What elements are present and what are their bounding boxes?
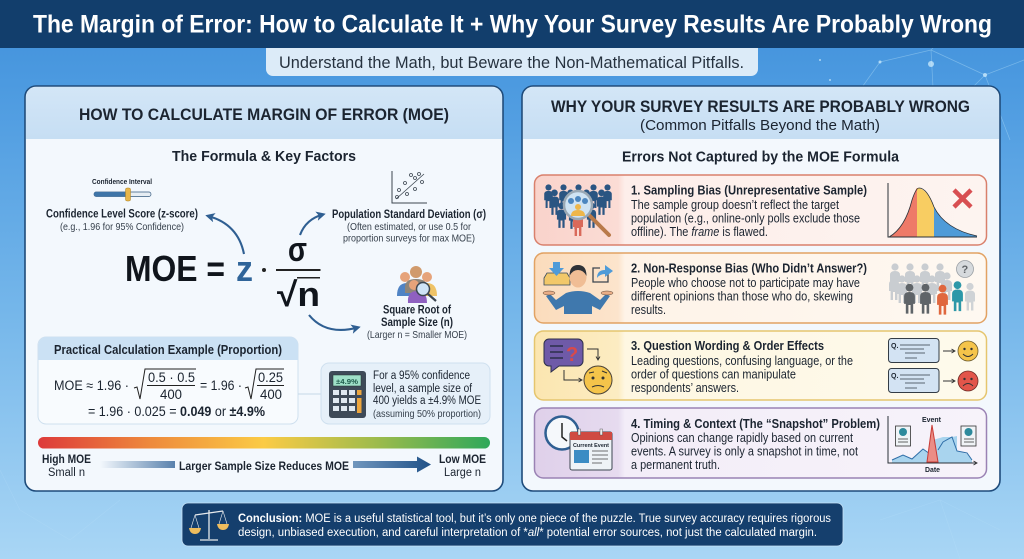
label: confidence level score: (e.g., 1.96 for 95% Confidence) <box>60 221 184 233</box>
panel heading: why results are wrong: WHY YOUR SURVEY RESULTS ARE PROBABLY WRONG <box>551 97 970 116</box>
label: square root of sample size: (Larger n = Smaller MOE) <box>367 329 467 341</box>
panel: how to calculate <box>25 86 503 491</box>
icon: non-respondents crowd: ? <box>962 264 968 276</box>
panel heading: how to calculate <box>26 87 502 139</box>
label: square root of sample size: Sample Size (n) <box>381 317 453 329</box>
heading: formula and key factors: The Formula & Key Factors <box>172 148 356 165</box>
formula <box>125 231 320 314</box>
callout text: 400 yields a ±4.9% MOE <box>373 395 481 407</box>
callout text: (assuming 50% proportion) <box>373 408 481 420</box>
icon: clock and calendar: Current Event <box>573 443 609 449</box>
chart: opinion over time with event spike: Date <box>925 467 940 474</box>
icon: confidence interval slider: Confidence Interval <box>92 177 152 186</box>
calculation working: = 1.96 · 0.025 = 0.049 or ±4.9% <box>88 404 265 419</box>
label: low moe: Large n <box>444 467 481 479</box>
icon: question forms and reactions: Q. <box>891 373 898 380</box>
icon: confusing question: ? <box>566 344 578 366</box>
icon: confidence interval slider <box>92 177 152 201</box>
panel heading: why results are wrong: (Common Pitfalls Beyond the Math) <box>640 118 880 134</box>
card text: population (e.g., online-only polls exclude those <box>631 212 860 226</box>
label: population standard deviation: (Often estimated, or use 0.5 for <box>347 221 471 233</box>
label: square root of sample size: Square Root of <box>383 304 451 316</box>
calculation working <box>54 369 284 419</box>
result callout with calculator <box>321 363 490 424</box>
formula: √n <box>277 276 320 314</box>
card text: events. A survey is only a snapshot in time, not <box>631 444 858 458</box>
card text <box>631 182 867 239</box>
heading: errors not captured: Errors Not Captured by the MOE Formula <box>622 150 900 166</box>
label: low moe: Low MOE <box>439 454 486 466</box>
conclusion text: design, unbiased execution, and careful interpretation of *all* potential error sources, not just the calculated margin. <box>238 527 817 539</box>
card text: Opinions can change rapidly based on current <box>631 431 853 445</box>
icon: crowd under magnifier <box>544 184 612 236</box>
card text <box>631 416 880 472</box>
example heading: Practical Calculation Example (Proportion) <box>54 342 282 357</box>
label: population standard deviation: Population Standard Deviation (σ) <box>332 209 486 221</box>
formula: σ <box>288 231 307 269</box>
subtitle <box>266 48 758 76</box>
callout text: For a 95% confidence <box>373 370 470 382</box>
card text: Leading questions, confusing language, or the <box>631 354 853 368</box>
callout text <box>373 370 481 420</box>
icon: calculator <box>329 371 366 418</box>
conclusion banner <box>182 503 843 546</box>
calculation working: 0.25 <box>258 370 283 385</box>
chart: opinion over time with event spike: Event <box>922 417 942 424</box>
arrow: sigma to standard deviation <box>300 214 323 235</box>
card: question wording <box>534 331 986 400</box>
card text: respondents’ answers. <box>631 381 739 395</box>
conclusion text <box>238 513 831 539</box>
icon: scatter plot <box>392 171 427 203</box>
icon: clock and calendar <box>546 416 612 470</box>
label: square root of sample size <box>367 304 467 341</box>
card: non-response bias <box>534 253 986 323</box>
card text: results. <box>631 303 666 317</box>
card: timing and context <box>534 408 986 478</box>
chart: opinion over time with event spike <box>888 416 977 474</box>
card text: offline). The frame is flawed. <box>631 225 768 239</box>
icon: non-respondents crowd <box>889 260 975 315</box>
card text <box>631 338 853 395</box>
label: confidence level score <box>46 208 198 233</box>
arrow: root n to sample size <box>309 315 358 330</box>
icon: skewed bell curve with cross <box>888 183 977 237</box>
arrow: larger sample size reduces moe <box>100 456 431 473</box>
calculation working: = 1.96 · <box>200 378 242 393</box>
card text: 3. Question Wording & Order Effects <box>631 338 824 353</box>
icon: shrugging person with inbox and share <box>543 262 613 314</box>
title banner <box>0 0 1024 48</box>
card text: 4. Timing & Context (The “Snapshot” Problem) <box>631 416 880 431</box>
conclusion text: Conclusion: MOE is a useful statistical tool, but it’s only one piece of the puzzle. True survey accuracy requires rigorous <box>238 513 831 525</box>
label: population standard deviation <box>332 209 486 244</box>
card text: The sample group doesn’t reflect the target <box>631 198 839 212</box>
label: high moe: Small n <box>48 467 85 479</box>
label: high moe: High MOE <box>42 454 91 466</box>
icon: group with magnifier <box>397 266 437 303</box>
label: confidence level score: Confidence Level Score (z-score) <box>46 208 198 220</box>
card text <box>631 260 867 317</box>
calculation working: 0.5 · 0.5 <box>148 370 195 385</box>
card text: a permanent truth. <box>631 458 720 472</box>
icon: confusing question <box>544 339 612 394</box>
arrow: larger sample size reduces moe: Larger Sample Size Reduces MOE <box>179 459 349 473</box>
callout text: level, a sample size of <box>373 383 473 395</box>
practical calculation example <box>38 337 298 424</box>
calculation working: MOE ≈ 1.96 · <box>54 378 129 393</box>
card text: order of questions can manipulate <box>631 368 796 382</box>
panel heading: how to calculate: HOW TO CALCULATE MARGIN OF ERROR (MOE) <box>79 105 449 124</box>
icon: question forms and reactions: Q. <box>891 343 898 350</box>
panel: why results are wrong <box>522 86 1000 491</box>
card text: different opinions than those who do, skewing <box>631 290 853 304</box>
card text: 1. Sampling Bias (Unrepresentative Sample) <box>631 182 867 198</box>
card text: People who choose not to participate may have <box>631 276 860 290</box>
gradient scale bar <box>38 437 490 448</box>
card: sampling bias <box>534 175 986 245</box>
icon: balance scales <box>189 510 229 540</box>
formula: MOE = <box>125 248 225 289</box>
icon: calculator: ±4.9% <box>336 377 358 386</box>
label: high moe <box>42 454 91 479</box>
icon: question forms and reactions <box>888 338 978 392</box>
card text: 2. Non-Response Bias (Who Didn’t Answer?) <box>631 260 867 276</box>
calculation working: 400 <box>260 387 282 402</box>
subtitle: Understand the Math, but Beware the Non-Mathematical Pitfalls. <box>279 54 744 72</box>
label: low moe <box>439 454 486 479</box>
arrow: z to confidence level <box>208 216 244 254</box>
formula: z <box>236 248 253 289</box>
calculation working: 400 <box>160 387 182 402</box>
panel heading: why results are wrong <box>523 87 999 139</box>
example heading <box>38 337 298 360</box>
label: population standard deviation: proportion surveys for max MOE) <box>343 232 475 244</box>
